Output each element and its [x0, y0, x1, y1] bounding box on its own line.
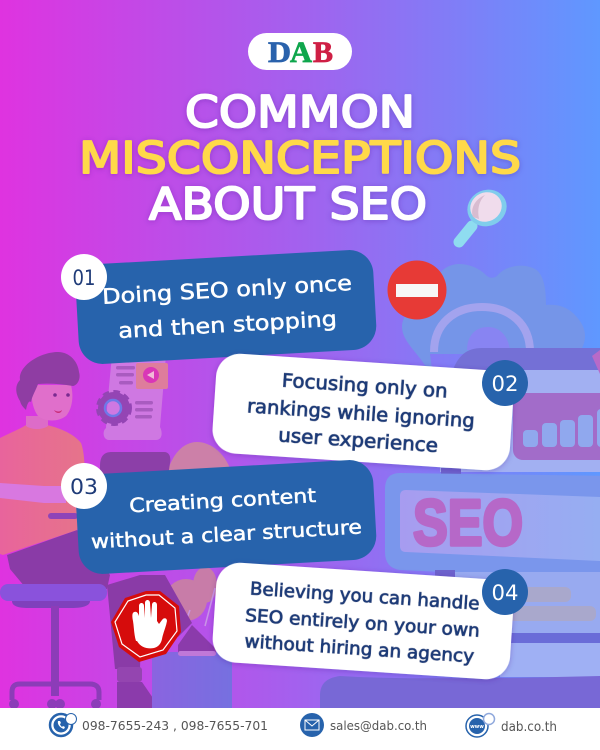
card 02: rankings while ignoring — [246, 396, 475, 432]
badge 02 — [482, 360, 528, 406]
footer — [0, 708, 600, 750]
phone numbers: 098-7655-243 , 098-7655-701 — [82, 718, 268, 733]
logo pill: A — [290, 36, 312, 69]
web icon: www — [470, 724, 484, 730]
title — [79, 87, 521, 230]
web icon — [466, 714, 494, 737]
email icon — [300, 713, 324, 737]
badge 01 — [61, 254, 107, 300]
badge 04: 04 — [492, 581, 518, 605]
card 02: Focusing only on — [281, 371, 448, 403]
card 03: without a clear structure — [91, 515, 362, 554]
card 04: Believing you can handle — [249, 578, 480, 615]
card 01 — [74, 249, 378, 365]
badge 03: 03 — [70, 475, 98, 499]
illustration: plant — [165, 442, 232, 632]
card 04: SEO entirely on your own — [245, 605, 480, 642]
illustration: person — [0, 352, 232, 709]
card 03 — [74, 459, 378, 575]
email address: sales@dab.co.th — [330, 718, 427, 733]
badge 02: 02 — [492, 372, 518, 396]
no-entry icon — [388, 260, 446, 320]
magnifier icon — [459, 183, 513, 242]
badge 04 — [482, 569, 528, 615]
card 02 — [211, 352, 515, 472]
title: MISCONCEPTIONS — [79, 133, 521, 184]
illustration: SEO computer — [320, 264, 600, 708]
badge 03 — [61, 463, 107, 509]
logo pill: B — [313, 36, 333, 69]
card 02: user experience — [278, 425, 439, 457]
card 01: and then stopping — [118, 307, 338, 343]
title: ABOUT SEO — [149, 179, 427, 230]
title: COMMON — [185, 87, 415, 138]
logo pill: D — [268, 36, 291, 69]
card 04 — [211, 561, 515, 681]
website: dab.co.th — [501, 720, 557, 735]
card 04: without hiring an agency — [244, 631, 475, 667]
illustration: document with gear — [99, 355, 168, 440]
phone icon — [50, 714, 76, 736]
card 01: Doing SEO only once — [102, 271, 353, 309]
illustration: SEO computer: SEO — [413, 486, 523, 559]
badge 01: 01 — [72, 266, 96, 290]
stop hand icon — [111, 591, 181, 662]
card 03: Creating content — [129, 484, 317, 517]
logo pill — [248, 33, 352, 70]
